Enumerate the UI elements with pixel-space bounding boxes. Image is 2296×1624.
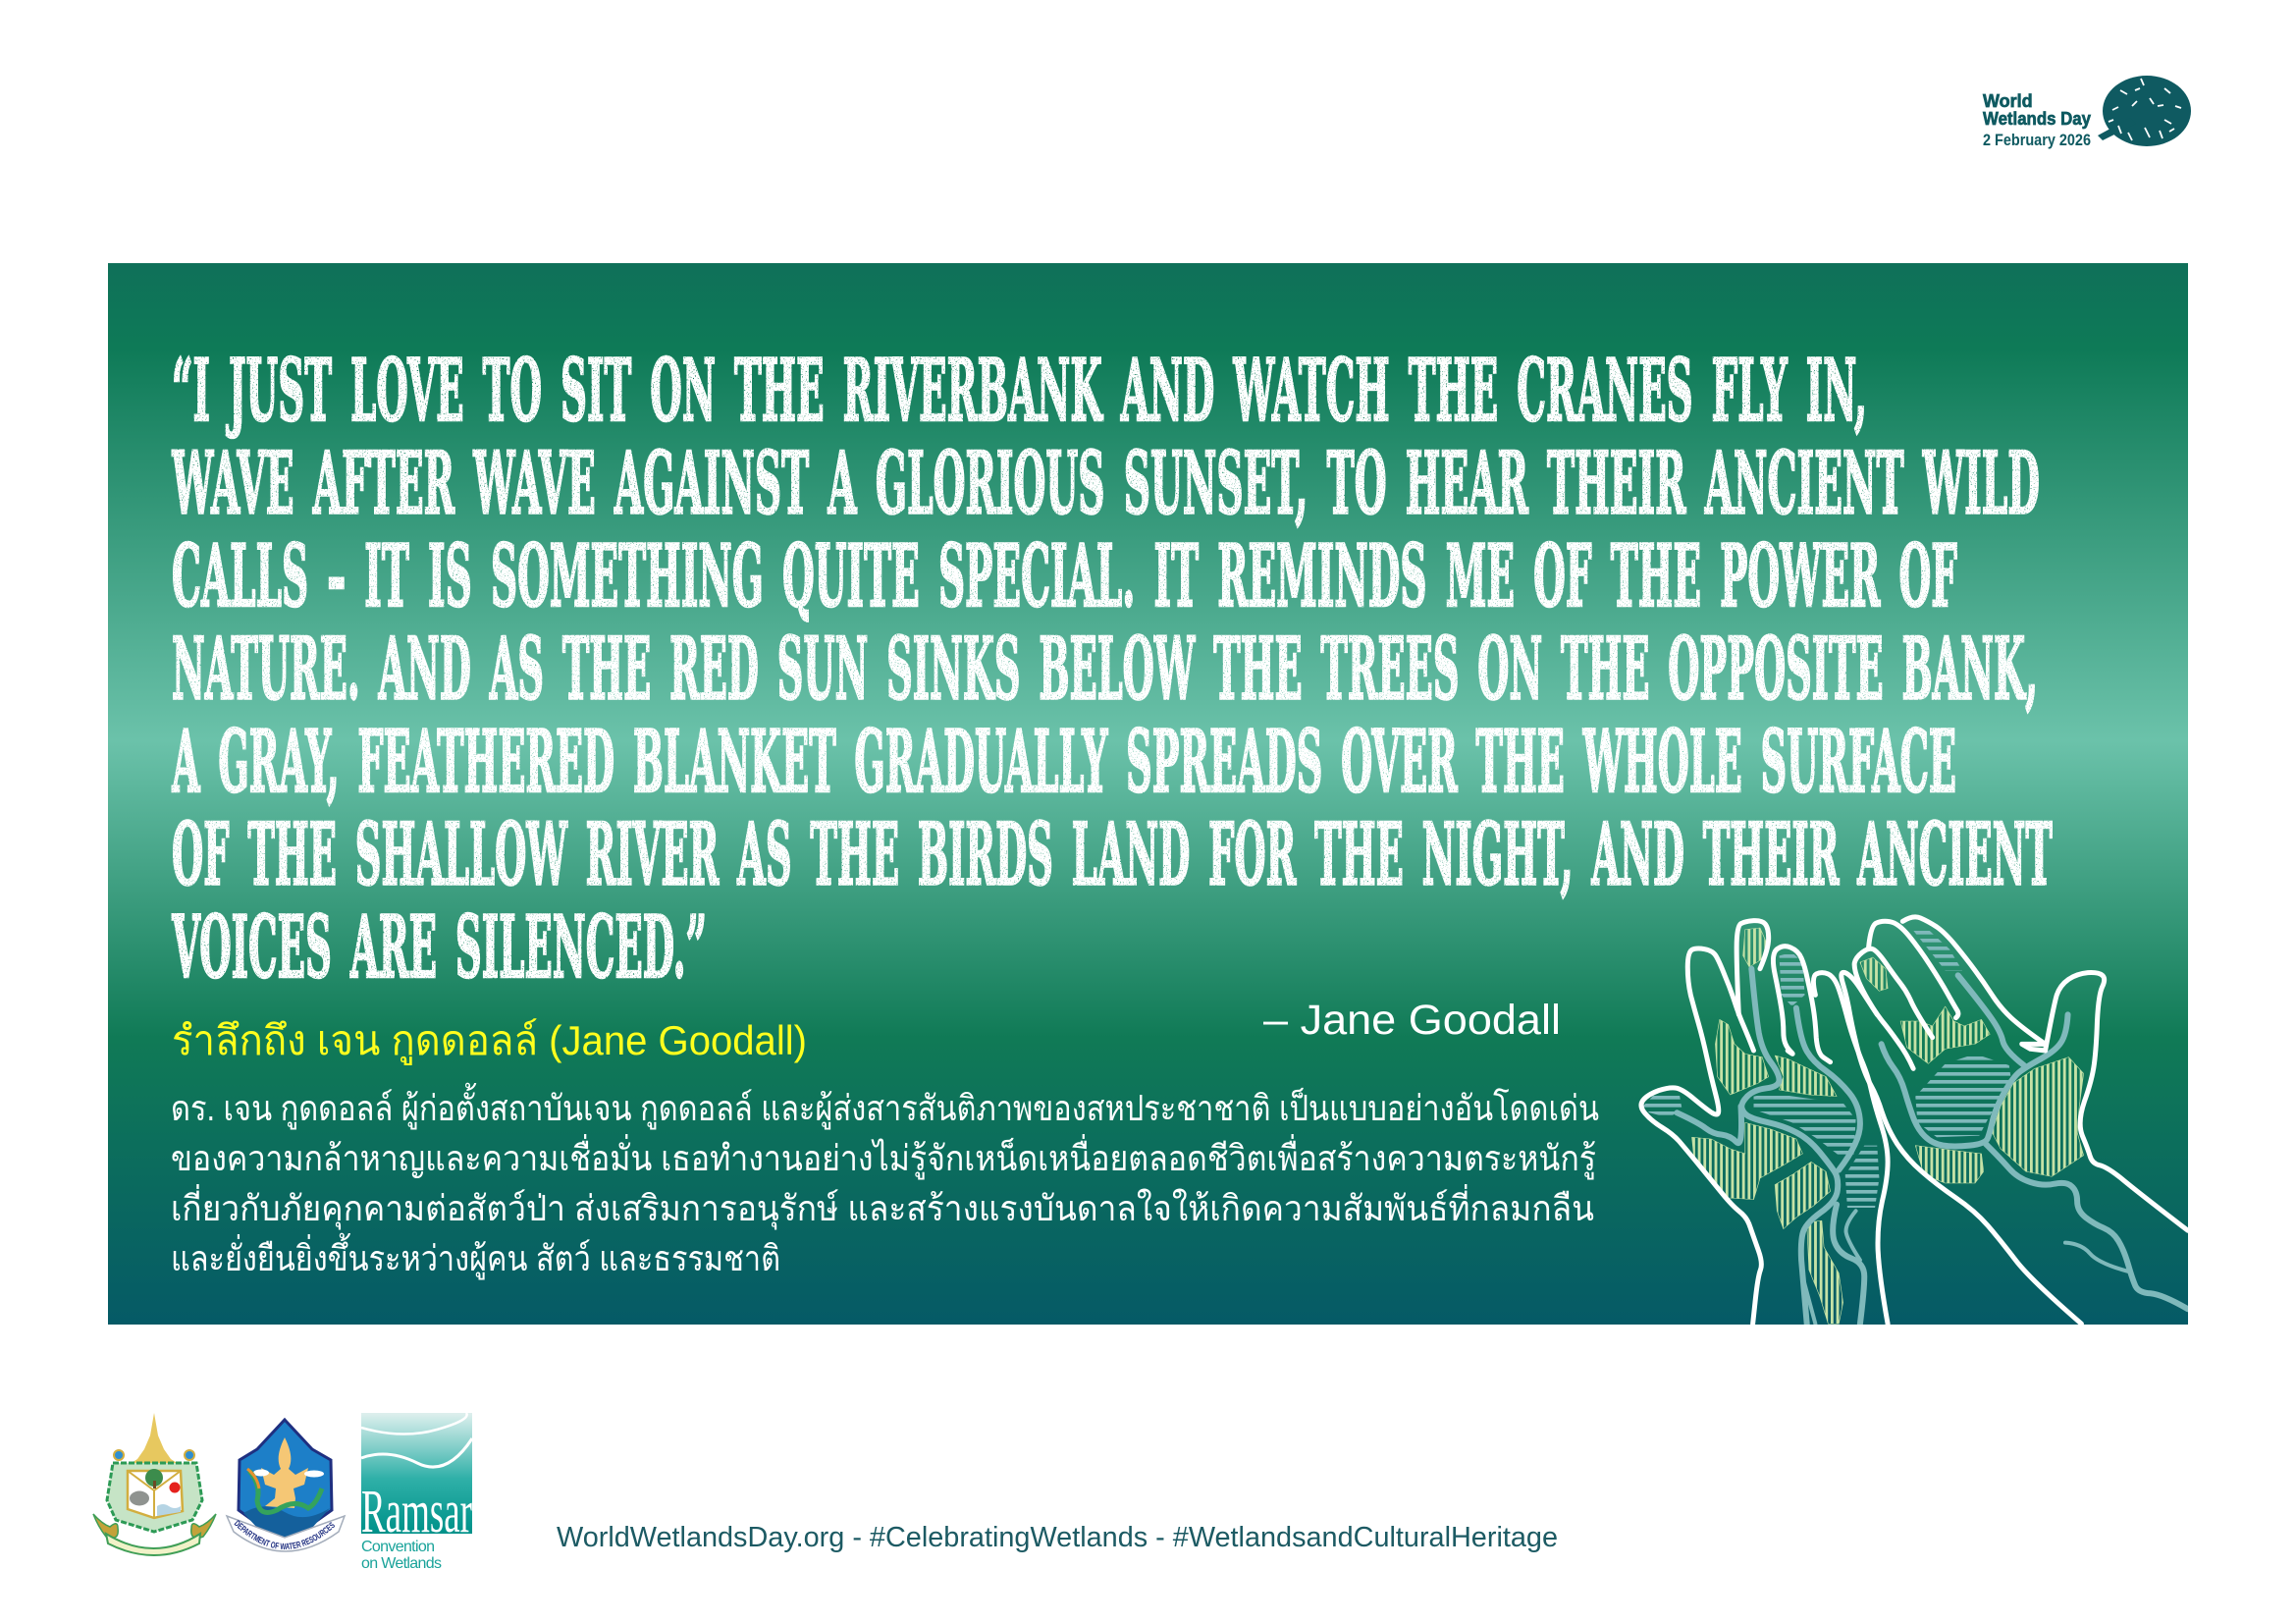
quote text [172, 340, 2053, 998]
Ramsar caption: Convention [361, 1539, 435, 1555]
logo wordmark [1983, 91, 2091, 149]
Thai body text [171, 1082, 1599, 1280]
Thai body text: และยั่งยืนยิ่งขึ้นระหว่างผู้คน สัตว์ และธรรมชาติ [171, 1232, 780, 1280]
quote attribution: – Jane Goodall [1263, 997, 1561, 1044]
crest elephant [130, 1490, 149, 1506]
crest spire [124, 1413, 185, 1468]
Ramsar wordmark: Ramsar [361, 1479, 472, 1545]
DWR naga and water [243, 1469, 330, 1538]
Thai body text: ของความกล้าหาญและความเชื่อมั่น เธอทำงานอย่างไม่รู้จักเหน็ดเหนื่อยตลอดชีวิตเพื่อสร้างความตระหนักรู้ [171, 1134, 1596, 1180]
logo: Department of Water Resources [226, 1418, 346, 1552]
crest tree [145, 1469, 163, 1489]
DWR shield [239, 1420, 332, 1543]
crest water [157, 1504, 181, 1516]
DWR clouds [253, 1469, 324, 1477]
logo: Ramsar Convention on Wetlands [361, 1413, 472, 1572]
logo globe emblem [2098, 76, 2191, 146]
footer link text: WorldWetlandsDay.org - #CelebratingWetlands - #WetlandsandCulturalHeritage [557, 1522, 1558, 1553]
crest shield [107, 1463, 202, 1532]
logo: World Wetlands Day [1983, 76, 2191, 149]
white hand outlines [1641, 917, 2188, 1324]
logo wordmark: 2 February 2026 [1983, 131, 2091, 149]
crest ribbon [93, 1514, 216, 1538]
teal river lines [1677, 969, 2188, 1324]
crest red sun [169, 1483, 181, 1492]
hatched teal water areas [1643, 928, 2011, 1208]
Thai heading: รำลึกถึง เจน กูดดอลล์ (Jane Goodall) [172, 1017, 807, 1065]
panel: green gradient background [108, 263, 2188, 1325]
Ramsar teal block [361, 1413, 472, 1534]
quote text: VOICES ARE SILENCED.” [172, 896, 707, 998]
DWR deity [261, 1437, 308, 1508]
illustration: cupped hands with wetland pattern [1641, 917, 2188, 1324]
crest inner panels [128, 1471, 183, 1518]
Thai body text: ดร. เจน กูดดอลล์ ผู้ก่อตั้งสถาบันเจน กูดดอลล์ และผู้ส่งสารสันติภาพของสหประชาชาติ เป็นแบบอย่างอันโดดเด่น [171, 1082, 1599, 1130]
DWR banner text: DEPARTMENT OF WATER RESOURCES [234, 1520, 335, 1549]
DWR banner [227, 1516, 345, 1551]
Thai body text: เกี่ยวกับภัยคุกคามต่อสัตว์ป่า ส่งเสริมการอนุรักษ์ และสร้างแรงบันดาลใจให้เกิดความสัมพันธ์ที่กลมกลืน [171, 1184, 1594, 1230]
hatched green wetland areas [1692, 928, 2084, 1324]
logo: provincial crest [93, 1413, 216, 1555]
logo wordmark: Wetlands Day [1983, 109, 2091, 129]
Ramsar caption [361, 1539, 442, 1572]
logo wordmark: World [1983, 91, 2033, 111]
crest orbs [114, 1450, 194, 1460]
Ramsar caption: on Wetlands [361, 1555, 442, 1572]
